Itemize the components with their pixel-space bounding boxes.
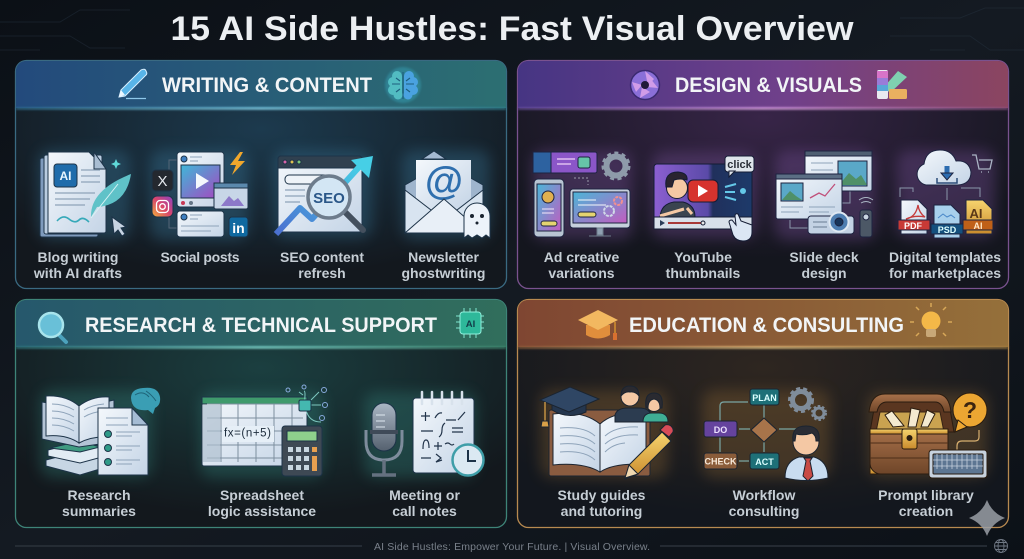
icon: study guides book, cap, students, pencil — [540, 386, 673, 479]
icon: pen — [119, 69, 147, 98]
label: slide deck design: Slide deck — [789, 249, 859, 265]
icon: newsletter envelope with ghost: @ — [425, 160, 463, 203]
icon: light bulb — [910, 303, 952, 337]
icon: workflow consulting flowchart: PLAN — [752, 393, 777, 403]
icon: globe — [994, 540, 1008, 552]
icon: YouTube thumbnail: click — [727, 159, 753, 171]
label: research summaries: summaries — [62, 503, 136, 519]
label: newsletter ghostwriting: Newsletter — [408, 249, 479, 265]
panel: research and technical support — [16, 300, 506, 528]
icon: digital templates: PDF — [904, 221, 923, 231]
icon: spreadsheet and calculator — [202, 385, 328, 476]
label: social posts: Social posts — [160, 249, 240, 265]
icon: AI chip — [456, 308, 484, 338]
label: digital templates for marketplaces: Digital templates — [889, 249, 1001, 265]
icon: spreadsheet and calculator: fx=(n+5) — [224, 428, 271, 440]
glow behind icons — [40, 390, 476, 478]
label: spreadsheet logic assistance: Spreadsheet — [220, 487, 304, 503]
panel header: research and technical support — [16, 300, 506, 347]
icon: social posts — [152, 152, 248, 237]
label: YouTube thumbnails: YouTube — [674, 249, 732, 265]
heading: writing and content: WRITING & CONTENT — [162, 74, 372, 97]
icon: aperture — [630, 70, 660, 100]
glow behind icons — [532, 150, 995, 240]
label: slide deck design: design — [801, 265, 847, 281]
icon: workflow consulting flowchart — [704, 388, 828, 481]
icon: SEO magnifier: SEO — [313, 190, 345, 207]
icon: ad creative variations — [533, 152, 630, 237]
glow behind icons — [38, 150, 490, 240]
icon: magnifying glass — [39, 313, 66, 342]
label: ad creative variations: variations — [548, 265, 615, 281]
label: ad creative variations: Ad creative — [544, 249, 619, 265]
label: newsletter ghostwriting: ghostwriting — [402, 265, 486, 281]
icon: newsletter envelope with ghost — [405, 151, 490, 238]
icon: research books and summary — [42, 388, 160, 475]
label: study guides and tutoring: and tutoring — [561, 503, 642, 519]
label: SEO content refresh: SEO content — [280, 249, 364, 265]
panel: design and visuals — [518, 60, 1008, 288]
icon: microphone and notepad with clock — [366, 392, 484, 476]
panel header: education and consulting — [518, 300, 1008, 347]
label: study guides and tutoring: Study guides — [558, 487, 646, 503]
heading: design and visuals: DESIGN & VISUALS — [675, 74, 862, 97]
icon: digital templates: AI — [970, 206, 982, 221]
icon: social posts: X — [157, 173, 168, 190]
label: blog writing: Blog writing — [38, 249, 118, 265]
icon: colour swatches — [877, 70, 907, 99]
label: prompt library creation: creation — [899, 503, 953, 519]
title: 15 AI Side Hustles: Fast Visual Overview — [170, 10, 854, 48]
icon: blog document with AI chip — [40, 152, 131, 237]
icon: workflow consulting flowchart: CHECK — [704, 456, 737, 466]
icon: brain — [385, 67, 421, 103]
label: spreadsheet logic assistance: logic assistance — [208, 503, 316, 519]
icon: prompt library treasure chest: ? — [963, 397, 977, 423]
icon: AI chip: AI — [466, 319, 475, 330]
label: digital templates for marketplaces: for marketplaces — [889, 265, 1001, 281]
panel: writing and content — [16, 60, 506, 288]
icon: graduation cap — [578, 310, 618, 340]
panel: education and consulting — [518, 300, 1008, 528]
icon: digital templates — [898, 150, 993, 238]
heading: research and technical support: RESEARCH & TECHNICAL SUPPORT — [85, 314, 437, 337]
label: SEO content refresh: refresh — [298, 265, 346, 281]
icon: YouTube thumbnail — [654, 156, 754, 241]
panel header: design and visuals — [518, 61, 1008, 108]
icon: social posts: in — [232, 220, 245, 236]
icon: prompt library treasure chest — [869, 393, 987, 478]
label: meeting or call notes: Meeting or — [389, 487, 460, 503]
label: blog writing: with AI drafts — [33, 265, 122, 281]
icon: blog document with AI chip: AI — [60, 169, 72, 183]
decoration: circuit traces — [0, 8, 1024, 50]
icon: slide deck and projector — [776, 151, 873, 237]
icon: sparkle watermark — [969, 500, 1005, 536]
heading: education and consulting: EDUCATION & CONSULTING — [629, 314, 904, 337]
icon: digital templates: PSD — [938, 225, 957, 235]
glow behind icons — [540, 390, 988, 478]
icon: workflow consulting flowchart: DO — [714, 425, 727, 435]
panel header: writing and content — [16, 61, 506, 108]
icon: SEO magnifier — [276, 156, 373, 234]
footer text: AI Side Hustles: Empower Your Future. | Visual Overview. — [374, 541, 650, 553]
label: prompt library creation: Prompt library — [878, 487, 974, 503]
label: research summaries: Research — [67, 487, 131, 503]
label: YouTube thumbnails: thumbnails — [666, 265, 741, 281]
footer — [15, 540, 1008, 553]
icon: digital templates: AI — [974, 221, 982, 231]
icon: workflow consulting flowchart: ACT — [755, 457, 774, 467]
label: meeting or call notes: call notes — [392, 503, 457, 519]
label: workflow consulting: Workflow — [733, 487, 795, 503]
label: workflow consulting: consulting — [729, 503, 799, 519]
